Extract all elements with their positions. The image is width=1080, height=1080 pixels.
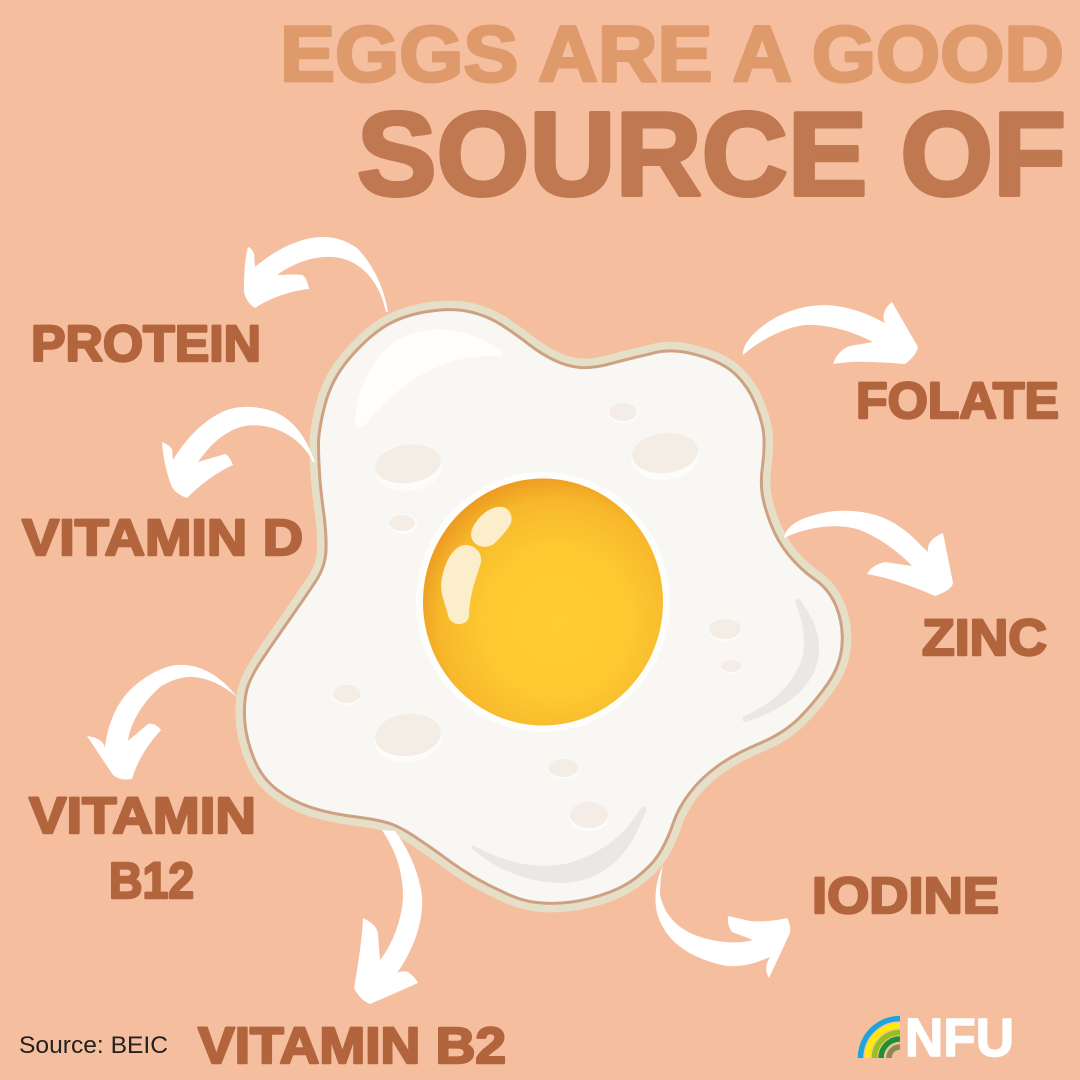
yolk bbox=[416, 472, 670, 732]
arrow: iodine bbox=[655, 865, 790, 978]
source note: Source: BEIC bbox=[19, 1032, 168, 1059]
title: SOURCE OF bbox=[357, 88, 1066, 221]
NFU logo bbox=[860, 1008, 1014, 1068]
title bbox=[280, 9, 1066, 221]
label: vitamin B2: VITAMIN B2 bbox=[198, 1017, 506, 1074]
arrow: vitamin B12 bbox=[87, 665, 237, 780]
arrow: folate bbox=[743, 302, 918, 364]
egg white bubbles bbox=[332, 403, 742, 831]
arrow: vitamin D bbox=[162, 407, 315, 498]
label: protein: PROTEIN bbox=[31, 315, 261, 372]
label: iodine: IODINE bbox=[812, 867, 999, 924]
label: zinc: ZINC bbox=[922, 609, 1047, 666]
wordmark: NFU bbox=[905, 1008, 1014, 1068]
label: folate: FOLATE bbox=[856, 372, 1059, 429]
arrow: zinc bbox=[784, 511, 953, 596]
icon: rainbow bbox=[860, 1018, 900, 1058]
arrow: protein bbox=[244, 237, 388, 312]
label: vitamin B12 bbox=[29, 787, 256, 909]
label: vitamin B12: VITAMIN bbox=[29, 787, 256, 844]
egg white shadows bbox=[472, 599, 819, 883]
title: EGGS ARE A GOOD bbox=[280, 9, 1064, 98]
label: vitamin B12: B12 bbox=[109, 852, 194, 909]
egg white highlight bbox=[355, 329, 502, 427]
arrow: vitamin B2 bbox=[354, 830, 422, 1004]
label: vitamin D: VITAMIN D bbox=[22, 509, 303, 566]
fried egg illustration bbox=[246, 311, 841, 902]
